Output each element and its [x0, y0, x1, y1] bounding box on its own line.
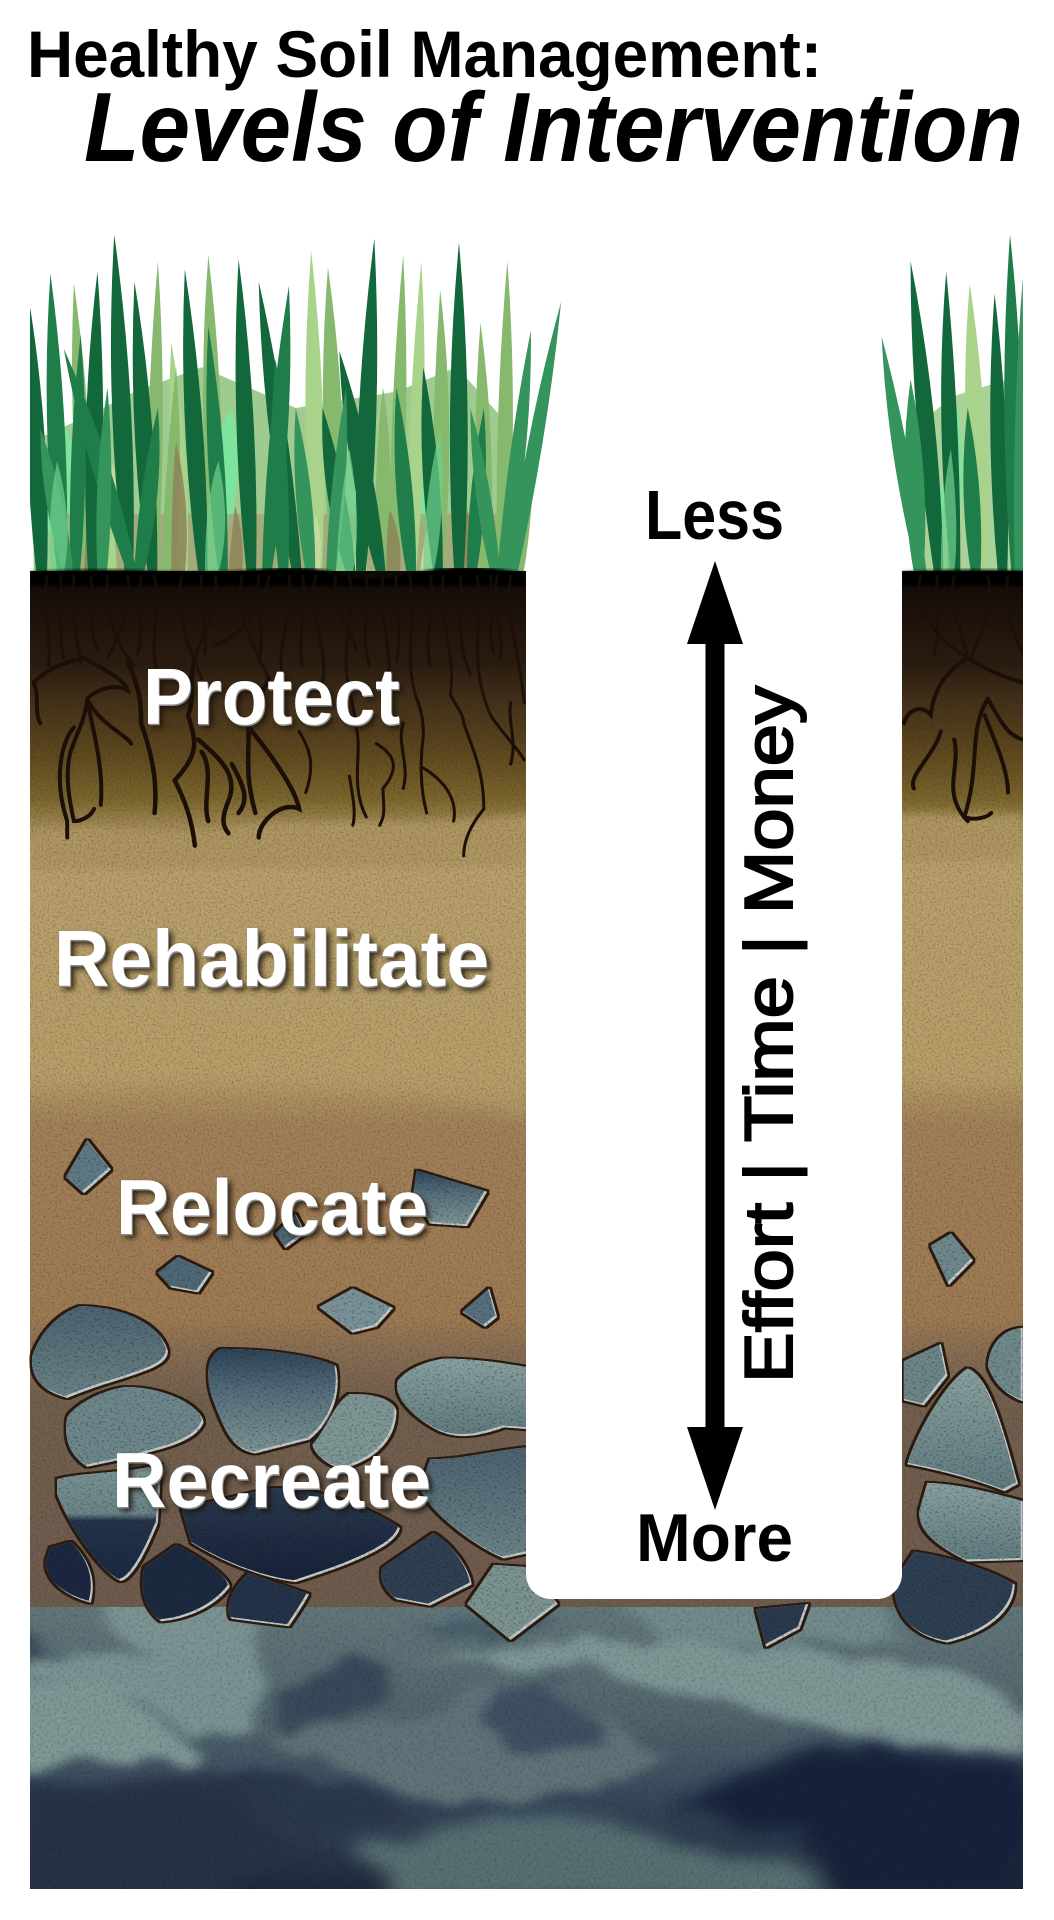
label: Less: Less: [645, 476, 784, 554]
bedrock light facets: [13, 1597, 1035, 1808]
white margin right of stones: [1023, 560, 1054, 1610]
label: More: More: [636, 1500, 793, 1576]
large stones: right column: [904, 1344, 948, 1405]
stones scattered in soil: [32, 1140, 1023, 1647]
double-headed arrow: [687, 561, 743, 1510]
band: sand boundary: [30, 815, 1023, 870]
band: sand to brown boundary: [456, 1088, 525, 1114]
soil top edge: [30, 566, 1023, 586]
grass illustration: [27, 235, 1024, 573]
level label: Relocate: Relocate: [116, 1163, 428, 1251]
plant roots: [34, 576, 1023, 856]
bedrock dark facets: [13, 1616, 605, 1842]
level label: Recreate: Recreate: [112, 1436, 431, 1524]
level label: Protect: Protect: [143, 652, 400, 741]
white panel for intervention scale: [526, 571, 902, 1599]
large stones: left column: [32, 1306, 168, 1398]
small stones: relocate layer: [66, 1140, 111, 1193]
title: Healthy Soil Management: Healthy Soil Management:: [27, 17, 822, 91]
bedrock deep shadow areas: [13, 1744, 1035, 1901]
level label: Rehabilitate: Rehabilitate: [54, 914, 489, 1003]
soil profile layers: [30, 566, 1023, 1607]
bedrock layer: [13, 1597, 1035, 1901]
vertical label: Effort | Time | Money: Effort | Time | Money: [731, 686, 807, 1383]
